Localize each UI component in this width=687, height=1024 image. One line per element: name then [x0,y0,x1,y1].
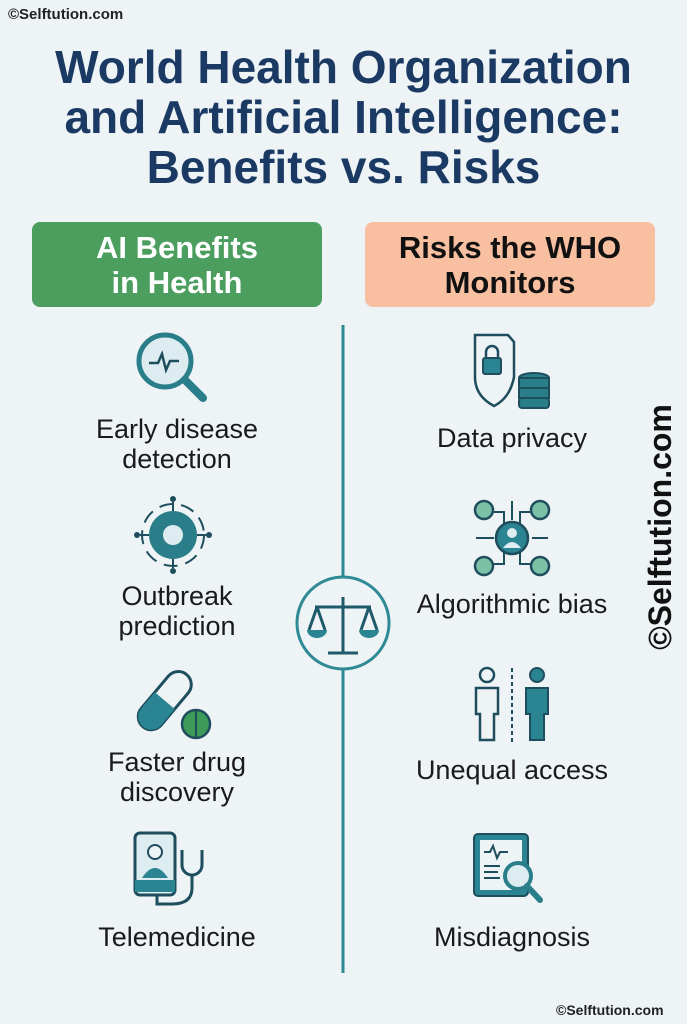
label: early detection: detection [122,444,232,474]
title: Benefits vs. Risks [147,141,540,193]
icon: pill [136,670,212,740]
icon: telemedicine [134,832,204,906]
label: drug discovery: Faster drug [108,747,246,777]
label: outbreak: prediction [118,611,236,641]
label: data privacy: Data privacy [437,423,587,453]
label: early detection [96,414,258,474]
label: outbreak [118,581,236,641]
label: drug discovery [108,747,246,807]
icon: unequal access [474,666,549,742]
label: unequal access: Unequal access [416,755,608,785]
icon: network bias [474,500,550,576]
label: misdiagnosis: Misdiagnosis [434,922,590,952]
icon: magnifier [136,332,207,402]
header: benefits [32,222,322,307]
label: early detection: Early disease [96,414,258,444]
icon: data privacy [474,334,550,409]
header: risks: Monitors [445,264,575,300]
icon: misdiagnosis [473,833,543,903]
label: algorithmic bias: Algorithmic bias [417,589,607,619]
title: World Health Organization [55,41,632,93]
icon: virus [134,496,212,574]
watermark top: ©Selftution.com [8,6,123,23]
header: risks: Risks the WHO [399,230,621,264]
vertical watermark: ©Selftution.com [642,404,678,650]
header: benefits: in Health [112,264,242,300]
title [55,41,632,193]
label: outbreak: Outbreak [121,581,233,611]
label: telemedicine: Telemedicine [98,922,256,952]
header: benefits: AI Benefits [96,230,258,264]
label: drug discovery: discovery [120,777,234,807]
header: risks [365,222,655,307]
watermark bottom: ©Selftution.com [556,1002,664,1018]
title: and Artificial Intelligence: [64,91,623,143]
